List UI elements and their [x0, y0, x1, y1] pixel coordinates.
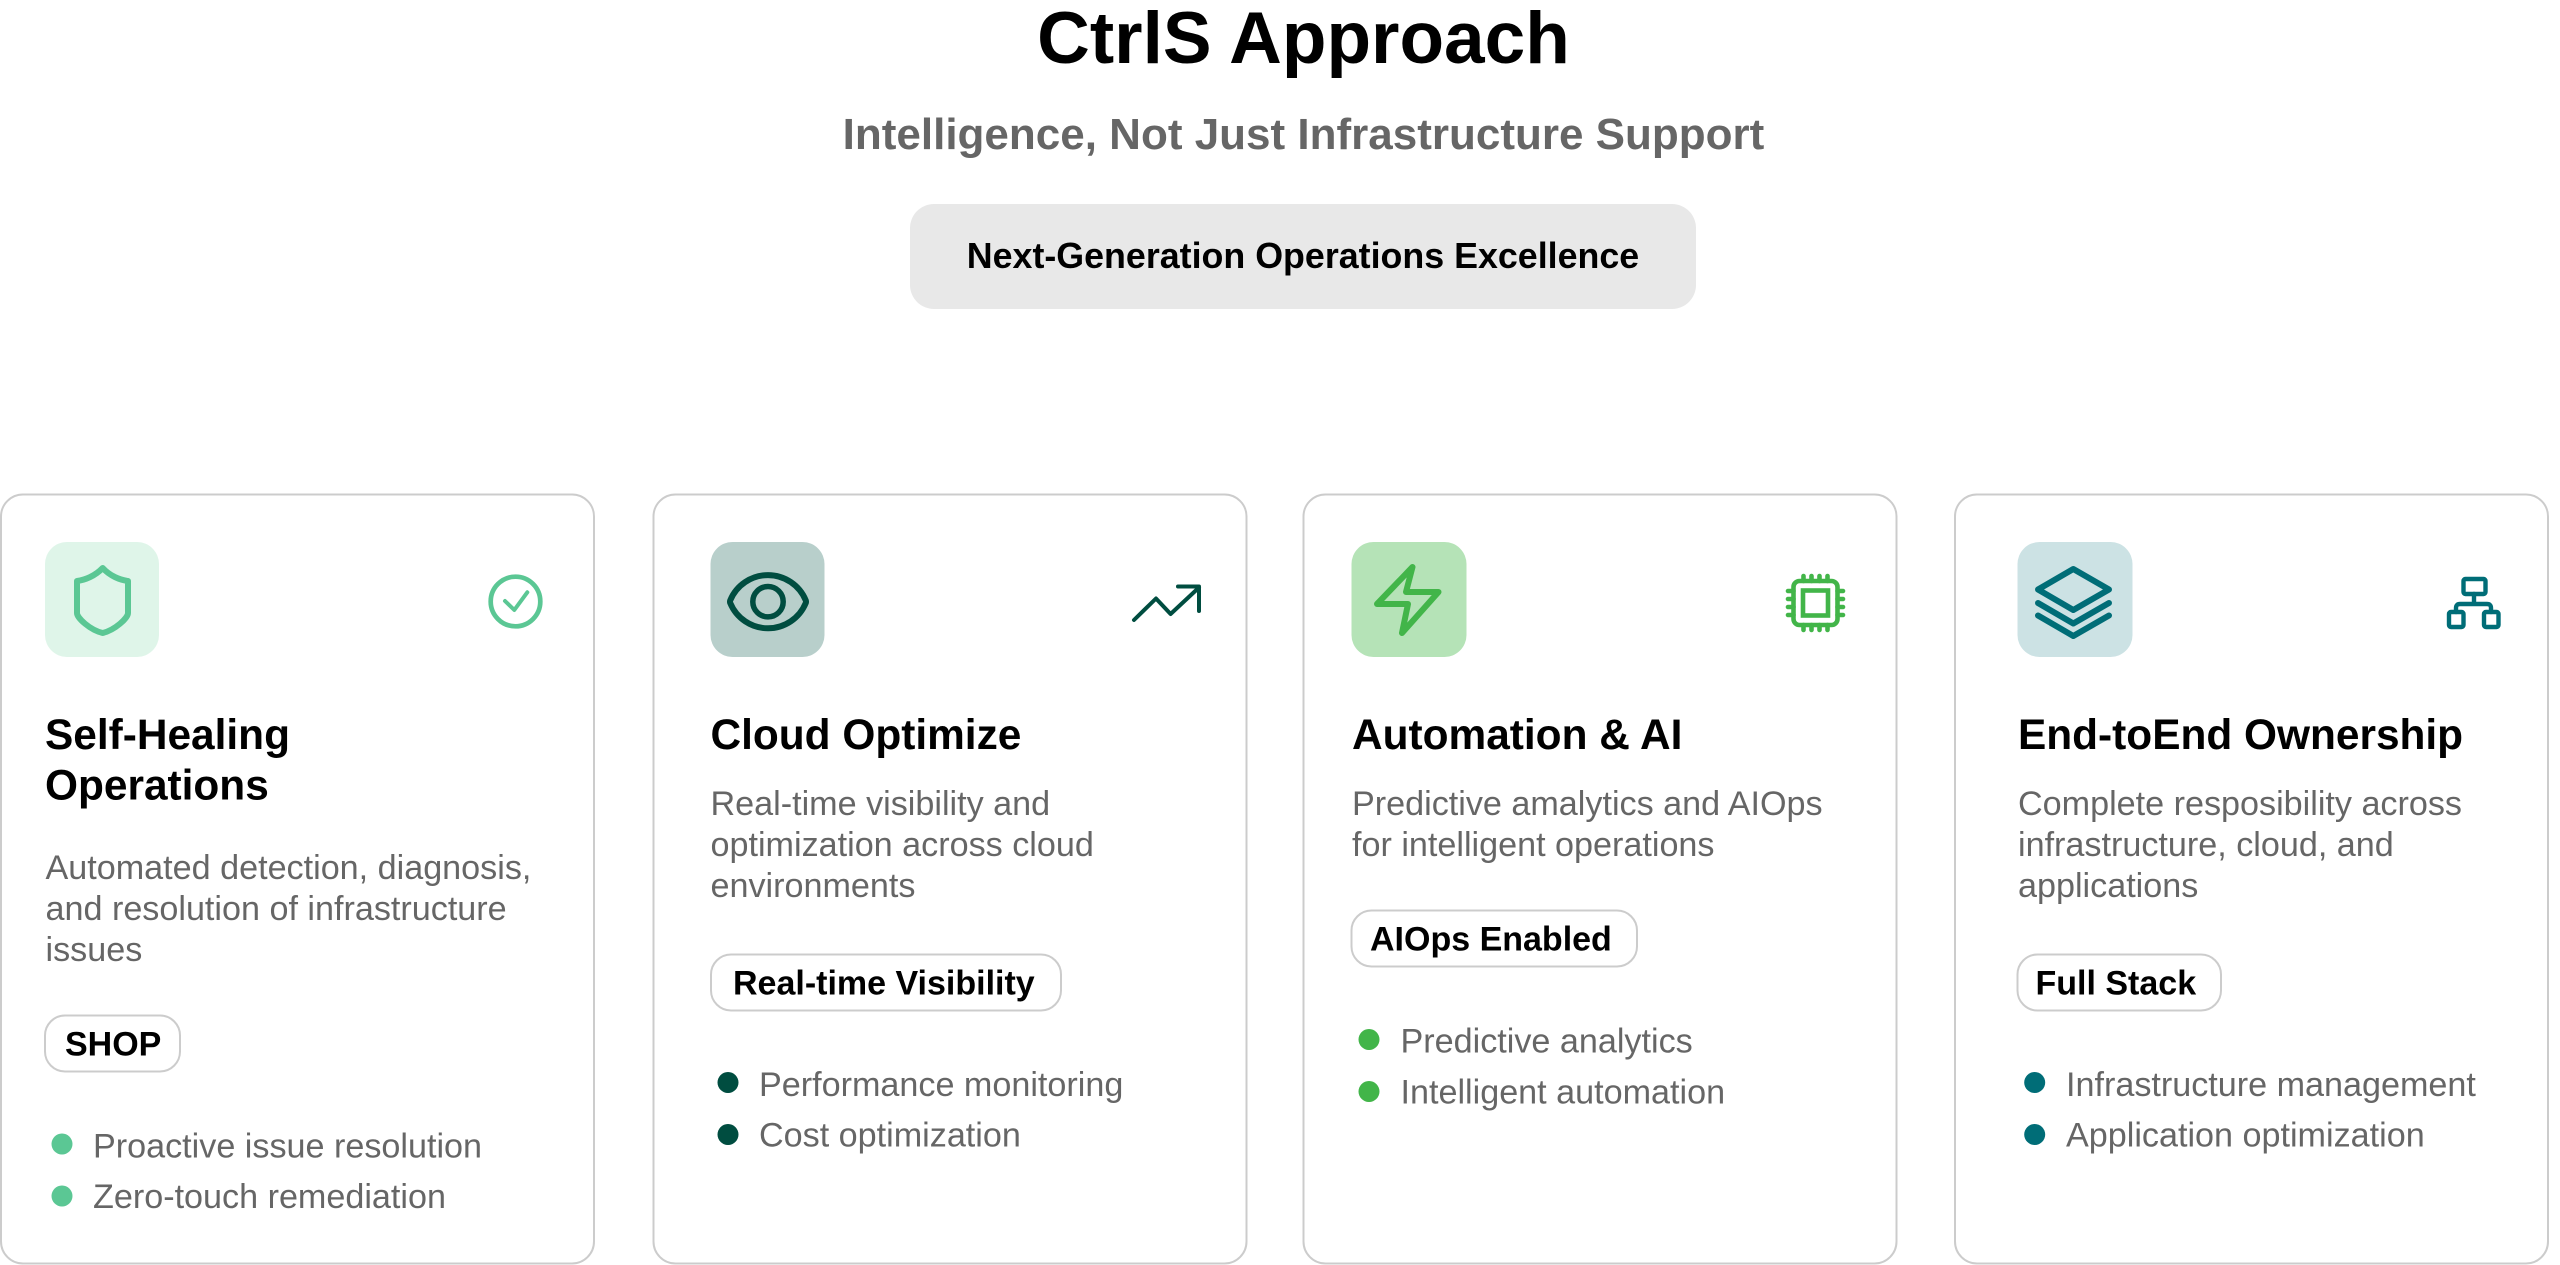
- bullet list: Cost optimization: [759, 1116, 1021, 1154]
- description: Predictive amalytics and AIOps: [1352, 785, 1823, 823]
- banner: next-generation operations excellence: [910, 204, 1696, 309]
- bullet list: Intelligent automation: [1400, 1074, 1725, 1112]
- panel: automation and AI: [1304, 494, 1896, 1264]
- icon: network hierarchy: [2449, 579, 2498, 627]
- heading: End-toEnd Ownership: [2018, 711, 2463, 758]
- icon: trending up arrow: [1134, 586, 1199, 620]
- description: and resolution of infrastructure: [46, 890, 507, 928]
- bullet list: [2024, 1066, 2476, 1154]
- tag: SHOP: [45, 1016, 180, 1072]
- tag: SHOP: SHOP: [65, 1026, 161, 1064]
- heading: Cloud Optimize: [710, 711, 1021, 758]
- banner: next-generation operations excellence: Next-Generation Operations Excellence: [967, 236, 1639, 276]
- subtitle: Intelligence, Not Just Infrastructure Support: [843, 110, 1765, 159]
- description: environments: [710, 867, 915, 905]
- tag: AIOps enabled: AIOps Enabled: [1370, 920, 1612, 958]
- panel: end-to-end ownership: [1955, 494, 2548, 1264]
- tag: full stack: Full Stack: [2036, 964, 2196, 1002]
- heading: Operations: [45, 762, 269, 808]
- description: infrastructure, cloud, and: [2018, 826, 2394, 864]
- description: Automated detection, diagnosis,: [46, 849, 531, 887]
- description: Complete resposibility across: [2018, 785, 2462, 823]
- description: applications: [2018, 867, 2198, 905]
- icon: chip: [1788, 576, 1843, 630]
- title: CtrlS Approach: [1037, 0, 1570, 79]
- icon: eye: [710, 542, 824, 657]
- bullet list: Performance monitoring: [759, 1066, 1123, 1104]
- tag: real-time visibility: [711, 954, 1061, 1010]
- icon: lightning bolt: [1352, 542, 1466, 657]
- description: for intelligent operations: [1352, 826, 1714, 864]
- tag: real-time visibility: Real-time Visibility: [733, 964, 1035, 1002]
- description: issues: [46, 931, 142, 969]
- bullet list: [1358, 1022, 1725, 1112]
- icon: shield: [45, 542, 159, 657]
- bullet list: Predictive analytics: [1400, 1022, 1693, 1060]
- heading: Automation & AI: [1352, 711, 1682, 758]
- bullet list: Infrastructure management: [2066, 1066, 2476, 1104]
- bullet list: Application optimization: [2066, 1116, 2425, 1154]
- description: optimization across cloud: [710, 826, 1094, 864]
- panel: self-healing operations: [1, 494, 594, 1264]
- heading: Self-Healing: [45, 711, 290, 758]
- panel: cloud optimize: [654, 494, 1246, 1264]
- bullet list: [718, 1066, 1123, 1154]
- icon: layers: [2018, 542, 2132, 657]
- icon: check circle: [491, 577, 540, 626]
- bullet list: [52, 1128, 482, 1216]
- description: Real-time visibility and: [710, 785, 1050, 823]
- bullet list: Proactive issue resolution: [93, 1128, 482, 1166]
- bullet list: Zero-touch remediation: [93, 1178, 446, 1216]
- tag: full stack: [2018, 954, 2221, 1010]
- tag: AIOps enabled: [1352, 910, 1637, 966]
